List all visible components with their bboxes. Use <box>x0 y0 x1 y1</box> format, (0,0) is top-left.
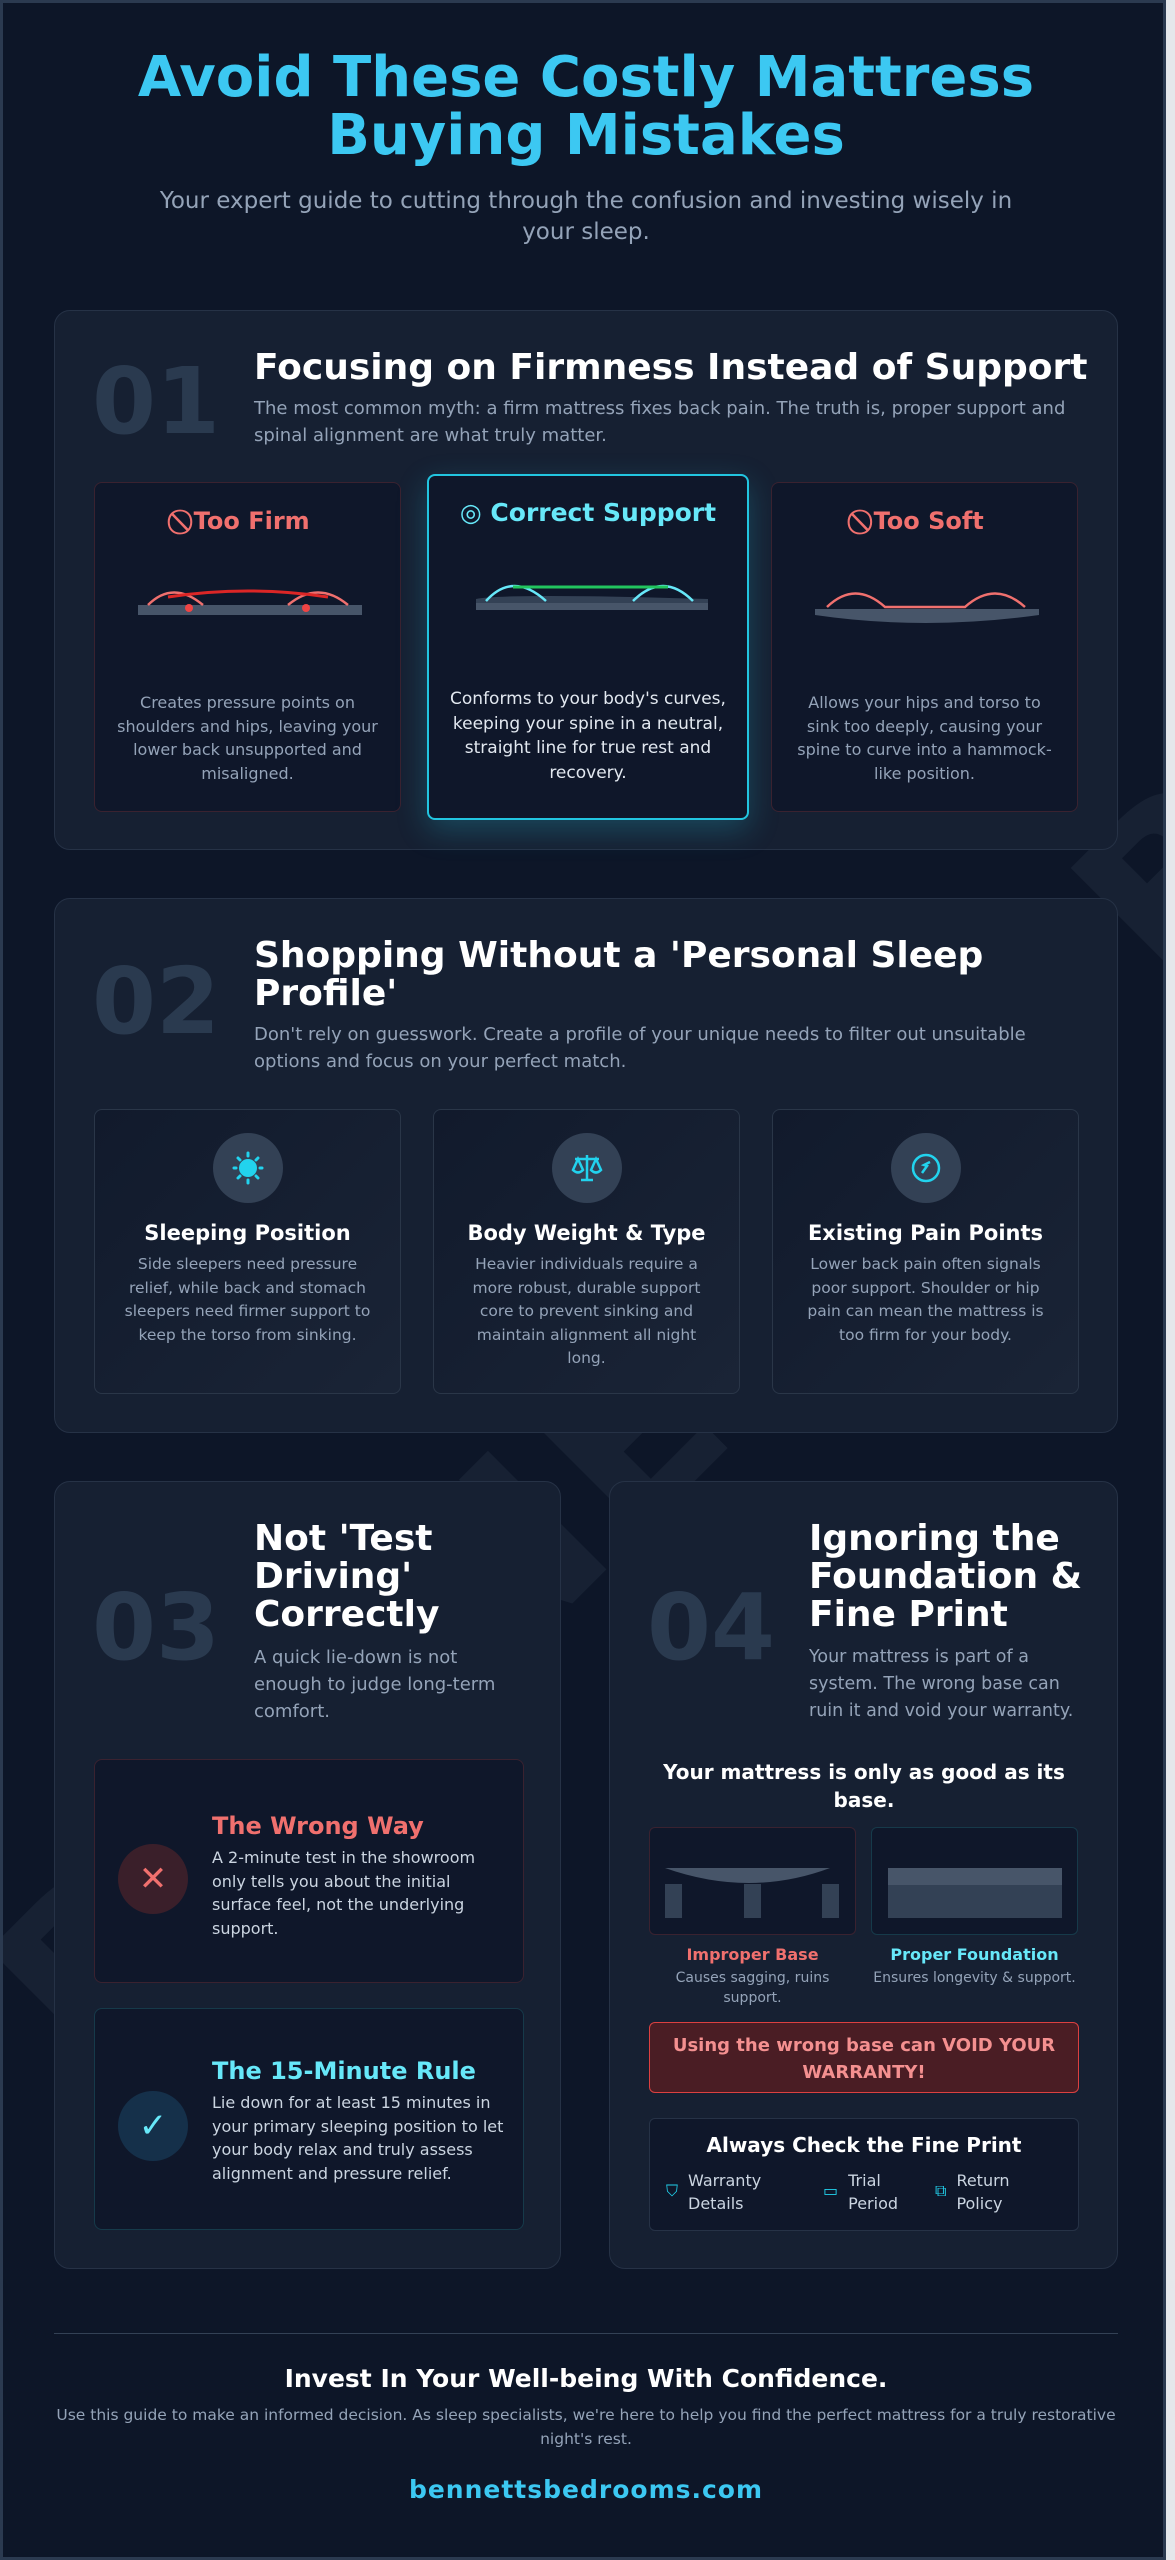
icon: check: ✓ <box>139 2106 167 2146</box>
description 01: The most common myth: a firm mattress fixes back pain. The truth is, proper support and spinal alignment are what truly matter. <box>254 398 1065 446</box>
label: proper foundation <box>873 1945 1076 1986</box>
card: 15-minute rule <box>94 2008 524 2230</box>
card: correct support: Conforms to your body's curves, keeping your spine in a neutral, straight line for true rest and recovery. <box>450 689 726 782</box>
warning callout: Using the wrong base can VOID YOUR WARRANTY! <box>673 2035 1055 2083</box>
number 02: 02 <box>92 948 220 1055</box>
card: too firm: ⃠ Too Firm <box>185 507 310 535</box>
footer text: Use this guide to make an informed decision. As sleep specialists, we're here to help you find the perfect mattress for a truly restorative night's rest. <box>56 2406 1116 2448</box>
card: wrong way: A 2-minute test in the showroom only tells you about the initial surface feel, not the underlying support. <box>212 1848 475 1938</box>
card: too soft: ⃠ Too Soft <box>865 507 984 535</box>
item: warranty <box>666 2171 761 2213</box>
icon: sun <box>212 1133 282 1203</box>
icon: scale <box>552 1133 622 1203</box>
icon: firm mattress <box>138 590 362 615</box>
item: trial <box>823 2171 898 2213</box>
card: too firm <box>94 482 401 812</box>
fine print box: Always Check the Fine Print <box>706 2133 1021 2157</box>
icon: pain <box>890 1133 960 1203</box>
number 04: 04 <box>647 1574 775 1681</box>
label: improper base <box>676 1945 829 2006</box>
card: wrong way <box>94 1759 524 1983</box>
card: sleeping position: Sleeping Position <box>144 1221 351 1245</box>
title: Avoid These Costly Mattress <box>138 45 1034 110</box>
description 03: A quick lie-down is not enough to judge long-term comfort. <box>254 1647 495 1722</box>
subheading base: Your mattress is only as good as its base. <box>663 1760 1065 1812</box>
number 03: 03 <box>92 1574 220 1681</box>
label: improper base: Improper Base <box>686 1945 819 1964</box>
illustration: improper base <box>649 1827 856 1935</box>
item: trial: Trial <box>848 2171 881 2190</box>
heading 02: Shopping Without a 'Personal Sleep Profile' <box>254 935 983 1014</box>
footer heading: Invest In Your Well-being With Confidence. <box>285 2364 887 2393</box>
icon: x <box>118 1844 188 1914</box>
website url: bennettsbedrooms.com <box>409 2475 763 2504</box>
label: proper foundation: Ensures longevity & support. <box>873 1970 1076 1986</box>
item: trial: ▭ <box>823 2181 838 2200</box>
panel: 02 sleep profile <box>54 898 1118 1433</box>
panel: 04 foundation <box>609 1481 1118 2269</box>
fine print box <box>649 2118 1079 2231</box>
card: 15-minute rule: Lie down for at least 15 minutes in your primary sleeping position to let your body relax and truly assess alignment and pressure relief. <box>212 2093 503 2182</box>
title <box>138 45 1034 168</box>
item: warranty: Warranty <box>688 2171 761 2190</box>
label: proper foundation: Proper Foundation <box>890 1945 1059 1964</box>
panel: 03 test driving <box>54 1481 561 2269</box>
subtitle: Your expert guide to cutting through the confusion and investing wisely in your sleep. <box>160 188 1012 245</box>
card: too soft <box>771 482 1078 812</box>
heading 04: Ignoring the Foundation & Fine Print <box>809 1518 1082 1635</box>
card: pain points: Existing Pain Points <box>808 1221 1043 1245</box>
card: sleeping position <box>94 1109 401 1394</box>
number 01: 01 <box>92 348 220 455</box>
card: sleeping position: Side sleepers need pressure relief, while back and stomach sleepers need firmer support to keep the torso from sinking. <box>125 1255 370 1344</box>
icon: soft mattress <box>815 592 1039 623</box>
item: warranty: ⛉ <box>666 2181 678 2200</box>
item: return: Policy <box>956 2194 1002 2213</box>
panel: 01 firmness <box>54 310 1118 850</box>
item: return: ⧉ <box>935 2181 946 2200</box>
card: too soft: Allows your hips and torso to sink too deeply, causing your spine to curve into a hammock-like position. <box>797 693 1052 782</box>
card: pain points: Lower back pain often signals poor support. Shoulder or hip pain can mean the mattress is too firm for your body. <box>807 1255 1044 1344</box>
heading 01: Focusing on Firmness Instead of Support <box>254 347 1087 388</box>
card: body weight <box>433 1109 740 1394</box>
title: Buying Mistakes <box>327 103 845 168</box>
card: body weight: Body Weight & Type <box>467 1221 706 1245</box>
description 04: Your mattress is part of a system. The wrong base can ruin it and void your warranty. <box>809 1647 1073 1721</box>
illustration: proper foundation <box>871 1827 1078 1935</box>
card: pain points <box>772 1109 1079 1394</box>
item: warranty: Details <box>688 2194 743 2213</box>
description 02: Don't rely on guesswork. Create a profile of your unique needs to filter out unsuitable options and focus on your perfect match. <box>254 1024 1026 1072</box>
card: correct support: ◎ Correct Support <box>460 498 716 527</box>
card: correct support <box>427 474 749 820</box>
card: wrong way: The Wrong Way <box>212 1812 424 1840</box>
icon: check <box>118 2091 188 2161</box>
label: improper base: Causes sagging, ruins support. <box>676 1970 829 2006</box>
icon: x: ✕ <box>139 1859 167 1899</box>
warning callout <box>649 2022 1079 2093</box>
card: body weight: Heavier individuals require a more robust, durable support core to prevent sinking and maintain alignment all night long. <box>473 1255 700 1367</box>
icon: correct mattress <box>476 584 708 610</box>
card: 15-minute rule: The 15-Minute Rule <box>212 2057 476 2085</box>
item: return <box>935 2171 1010 2213</box>
item: return: Return <box>956 2171 1010 2190</box>
card: too firm: Creates pressure points on shoulders and hips, leaving your lower back unsupported and misaligned. <box>117 693 378 782</box>
heading 03: Not 'Test Driving' Correctly <box>254 1518 439 1635</box>
item: trial: Period <box>848 2194 898 2213</box>
